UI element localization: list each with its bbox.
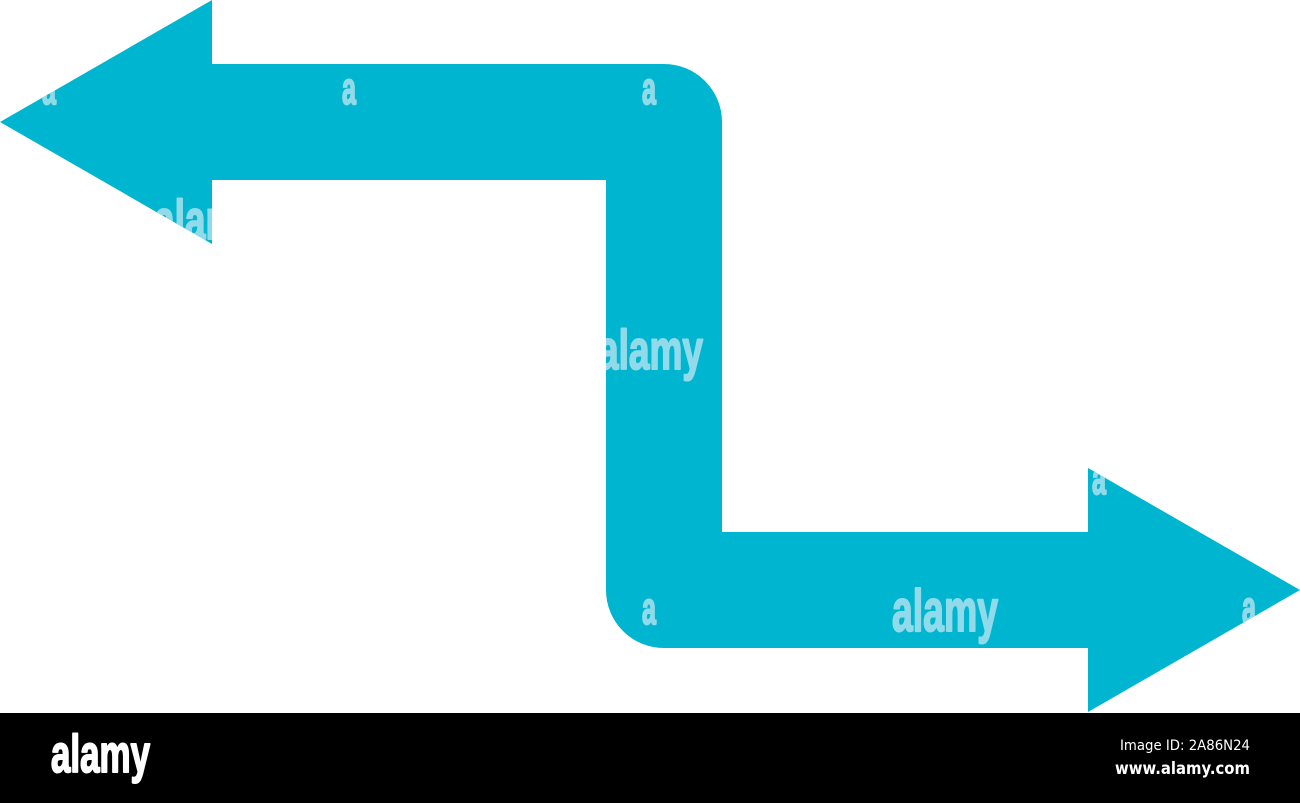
watermarks on arrow: a xyxy=(642,583,657,634)
footer bar xyxy=(0,713,1300,803)
footer logo: alamy xyxy=(51,725,150,784)
watermarks on arrow: a xyxy=(42,63,57,114)
website address: www.alamy.com xyxy=(1115,759,1250,778)
watermarks on arrow: alamy xyxy=(598,318,703,381)
watermarks on arrow: alamy xyxy=(154,188,259,251)
watermarks on arrow: a xyxy=(342,63,357,114)
watermarks on arrow: alamy xyxy=(892,578,998,644)
image id: Image ID: 2A86N24 xyxy=(1120,738,1250,754)
watermarks on arrow: a xyxy=(642,63,657,114)
watermarks on arrow xyxy=(42,63,1257,644)
watermarks on arrow: a xyxy=(1242,582,1257,633)
watermarks on arrow: a xyxy=(1092,453,1107,504)
